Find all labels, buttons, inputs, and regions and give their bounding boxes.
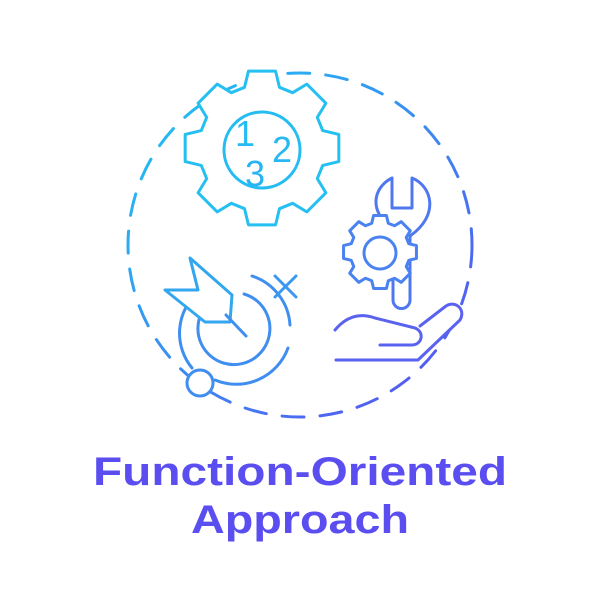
icon: big gear with numbers: 3 bbox=[245, 153, 265, 194]
dashed circle bbox=[128, 73, 472, 417]
icon: big gear with numbers: 1 bbox=[235, 113, 255, 154]
icon: big gear with numbers: 2 bbox=[272, 129, 292, 170]
icon: big gear with numbers bbox=[185, 71, 339, 225]
icon: target with arrow bbox=[165, 258, 296, 396]
title: Function-Oriented bbox=[93, 450, 507, 494]
icon: wrench with gear on hand bbox=[335, 178, 462, 360]
title bbox=[93, 450, 507, 542]
title: Approach bbox=[191, 498, 409, 542]
